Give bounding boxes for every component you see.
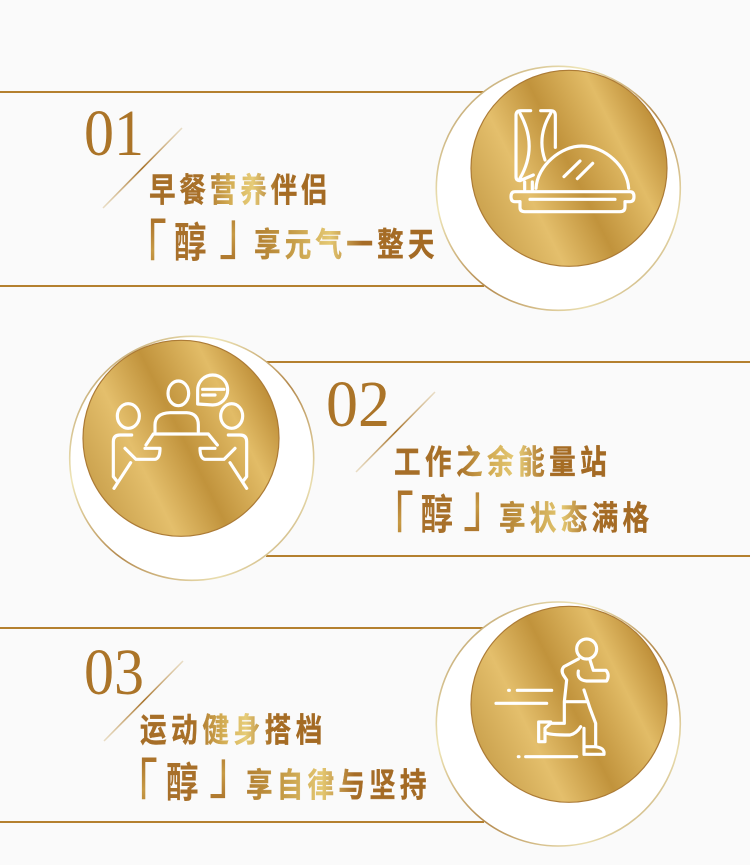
number 03: 03 (84, 636, 144, 709)
tagline (368, 473, 649, 559)
number 02: 02 (326, 368, 390, 441)
outer ring (436, 66, 680, 310)
panel: work (70, 336, 750, 580)
tagline: 享元气一整天 (254, 227, 434, 264)
heading: 早餐营养伴侣 (149, 173, 328, 209)
gold disc (471, 70, 667, 266)
tagline: 醇 (420, 491, 453, 538)
rule lines top and bottom (266, 362, 750, 556)
tagline: 醇 (174, 219, 207, 266)
icon: meeting table (113, 375, 247, 488)
heading: 工作之余能量站 (394, 445, 607, 481)
tagline: 醇 (166, 759, 199, 806)
outer ring (70, 336, 314, 580)
tagline: 「 (368, 486, 414, 559)
tagline: 」 (463, 473, 509, 539)
icon: runner (496, 639, 608, 757)
tagline (112, 740, 426, 826)
panel: sport (0, 602, 680, 846)
tagline: 「 (112, 753, 158, 826)
tagline: 」 (219, 201, 265, 267)
tagline: 享自律与坚持 (246, 768, 426, 804)
outer ring (436, 602, 680, 846)
number 01: 01 (84, 97, 144, 170)
icon: bottle and covered dish (511, 111, 634, 212)
slash (356, 392, 435, 472)
gold disc (83, 340, 279, 536)
gold disc (471, 606, 667, 802)
tagline: 享状态满格 (499, 501, 649, 537)
tagline: 」 (209, 740, 255, 806)
panel: breakfast (0, 66, 680, 310)
tagline: 「 (121, 214, 167, 287)
rule lines top and bottom (0, 628, 484, 822)
heading: 运动健身搭档 (140, 713, 322, 749)
rule lines top and bottom (0, 92, 484, 286)
slash (103, 128, 182, 208)
slash (104, 661, 183, 741)
tagline (121, 201, 434, 287)
